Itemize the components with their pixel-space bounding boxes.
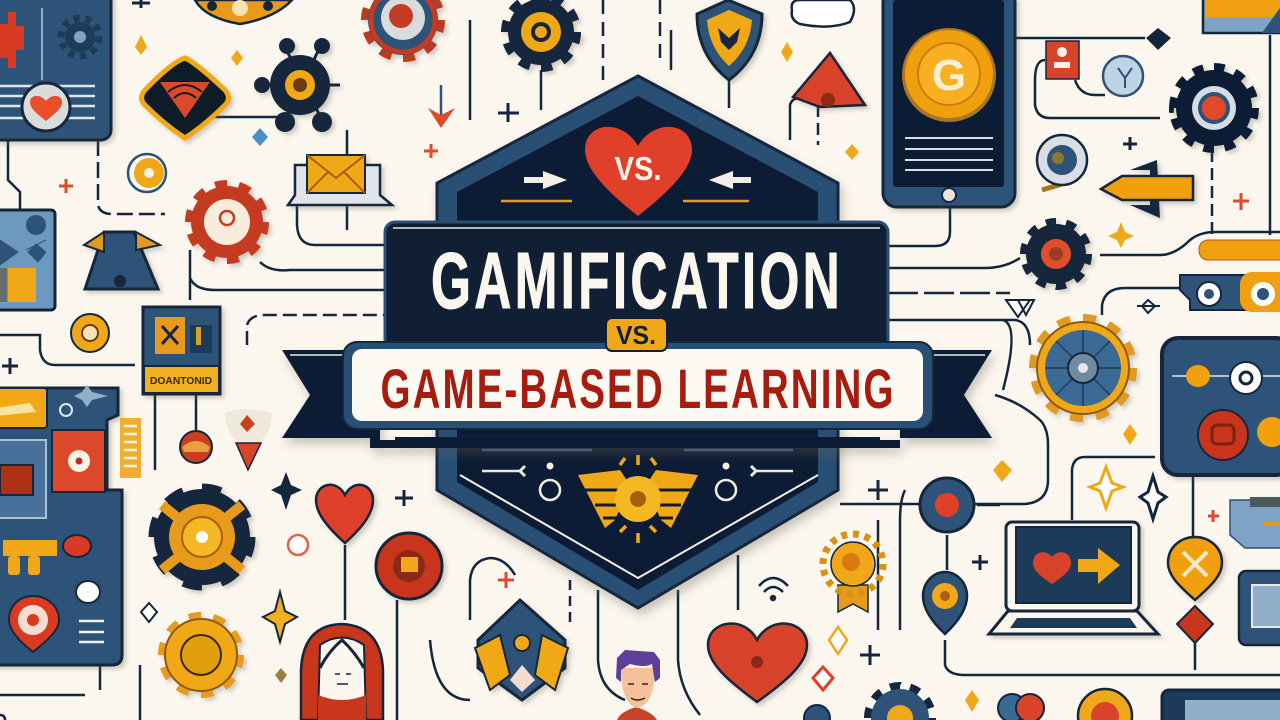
icon: coin bottom	[1078, 689, 1132, 720]
icon: orange gear top	[195, 0, 292, 24]
lines	[79, 621, 104, 642]
vertical stem	[41, 8, 43, 80]
icon: red round button	[376, 533, 442, 599]
icon: shield	[697, 0, 762, 80]
icon: red triangle	[793, 53, 865, 107]
icon: heart left	[316, 485, 373, 543]
panel: machine	[1180, 272, 1280, 312]
dots	[546, 462, 730, 470]
icon: orange pin x	[1168, 537, 1222, 600]
icon: red plus marks	[59, 144, 1249, 588]
icon: red down arrow	[428, 85, 455, 128]
icon: envelope banner	[288, 155, 392, 205]
icon: blue gear	[61, 18, 99, 56]
panel: tablet	[883, 0, 1015, 207]
icon: diamonds small top	[135, 35, 859, 160]
icon: heart button	[22, 83, 70, 131]
coin letter: G	[932, 51, 966, 100]
icon: gear black right	[1174, 68, 1254, 148]
lower lines and arrows	[482, 449, 793, 451]
icon: round red target	[920, 478, 974, 532]
icon: sparkle outline orange	[1090, 467, 1123, 508]
arrow right	[524, 171, 567, 189]
sign text: DOANTONID	[150, 375, 212, 387]
panel: subtitle plate	[343, 342, 933, 429]
icon: wifi diamond badge	[142, 58, 228, 138]
icon: shield badge	[225, 409, 272, 470]
icon: blue hat	[84, 232, 160, 289]
icon: heart with vs	[585, 127, 692, 216]
icon: gear orange left	[152, 487, 252, 587]
icon: red small ring	[288, 535, 308, 555]
orange slider	[3, 540, 57, 575]
small swirl and star	[60, 385, 108, 416]
icon: blue diamond	[252, 128, 268, 146]
icon: wifi	[759, 578, 788, 600]
red pin button	[9, 596, 59, 652]
red square	[52, 430, 105, 492]
icon: red wifi gem	[1177, 606, 1213, 643]
subtitle: GAME-BASED LEARNING	[380, 357, 896, 420]
icon: orange sparkles right	[993, 222, 1137, 482]
icon: arrow left orange	[1101, 160, 1193, 218]
icon: orange pin lower	[923, 572, 967, 634]
orange label	[0, 388, 47, 428]
icon: orange ring	[71, 314, 109, 352]
icon: triangle mark	[1006, 300, 1034, 317]
icon: red plus pixel	[0, 12, 24, 68]
icon: small eye mark	[1137, 300, 1160, 313]
icon: gold gear right	[1035, 320, 1131, 416]
icon: gear navy right	[1024, 222, 1088, 286]
vs badge text: VS.	[616, 320, 656, 350]
panel: small right card	[1230, 497, 1280, 548]
home button	[942, 188, 956, 202]
panel: top right orange card	[1203, 0, 1280, 33]
title: GAMIFICATION	[431, 236, 843, 325]
icon: lens badge	[1037, 135, 1087, 190]
icon: diamond right	[1146, 28, 1171, 50]
icon: red gear left	[189, 184, 265, 260]
icon: big heart	[708, 624, 807, 702]
white button	[76, 581, 100, 603]
white chevron line	[460, 475, 818, 578]
icon: small diamonds lower	[813, 627, 979, 712]
icon: navy gear top	[505, 0, 577, 68]
panel: left diagram card	[0, 210, 55, 310]
icon: heart pair bottom	[998, 694, 1044, 720]
heart vs text: VS.	[614, 150, 662, 187]
icon: presenter face	[616, 650, 660, 720]
lines	[905, 138, 993, 170]
icon: red round lantern	[180, 431, 212, 463]
panel: top-left dashboard	[0, 0, 111, 140]
circles	[540, 480, 736, 500]
icon: sparkle outline dark	[1140, 476, 1166, 519]
icon: medal	[823, 534, 883, 612]
icon: gold coin	[902, 28, 996, 122]
icon: cloud	[792, 0, 854, 27]
lines	[0, 86, 95, 118]
icon: spiral ring	[128, 154, 166, 192]
icon: star dark	[271, 472, 302, 510]
icon: orange list	[120, 418, 141, 478]
panel: bottom right card	[1239, 571, 1280, 645]
icon: connected node	[254, 38, 340, 132]
panel: sign	[143, 307, 220, 394]
panel: bottom monitor	[1162, 690, 1280, 720]
icon: woman portrait	[301, 624, 383, 720]
icon: red tag	[1046, 41, 1079, 79]
icon: red gear top	[365, 0, 441, 58]
icon: gear gold left	[163, 617, 239, 693]
panel: right control	[1162, 338, 1280, 475]
orange rules	[501, 200, 749, 202]
icon: diamonds small left	[141, 592, 297, 683]
icon: gear bottom	[868, 686, 932, 720]
red button	[63, 535, 91, 557]
arrow left	[709, 171, 751, 189]
panel: title plate	[385, 222, 888, 352]
panel: ribbon	[282, 350, 992, 448]
icon: light blue ball	[1103, 56, 1143, 96]
panel: central hexagon badge	[437, 76, 838, 608]
icon: blue shield with orange wings	[475, 600, 568, 700]
panel: laptop	[989, 522, 1158, 634]
panel: left console	[0, 385, 122, 665]
screen	[0, 440, 46, 518]
icon: small round bottom	[804, 705, 830, 720]
icon: orange bar	[1199, 240, 1280, 260]
vs badge	[606, 318, 667, 351]
icon: winged sun emblem	[578, 455, 698, 543]
